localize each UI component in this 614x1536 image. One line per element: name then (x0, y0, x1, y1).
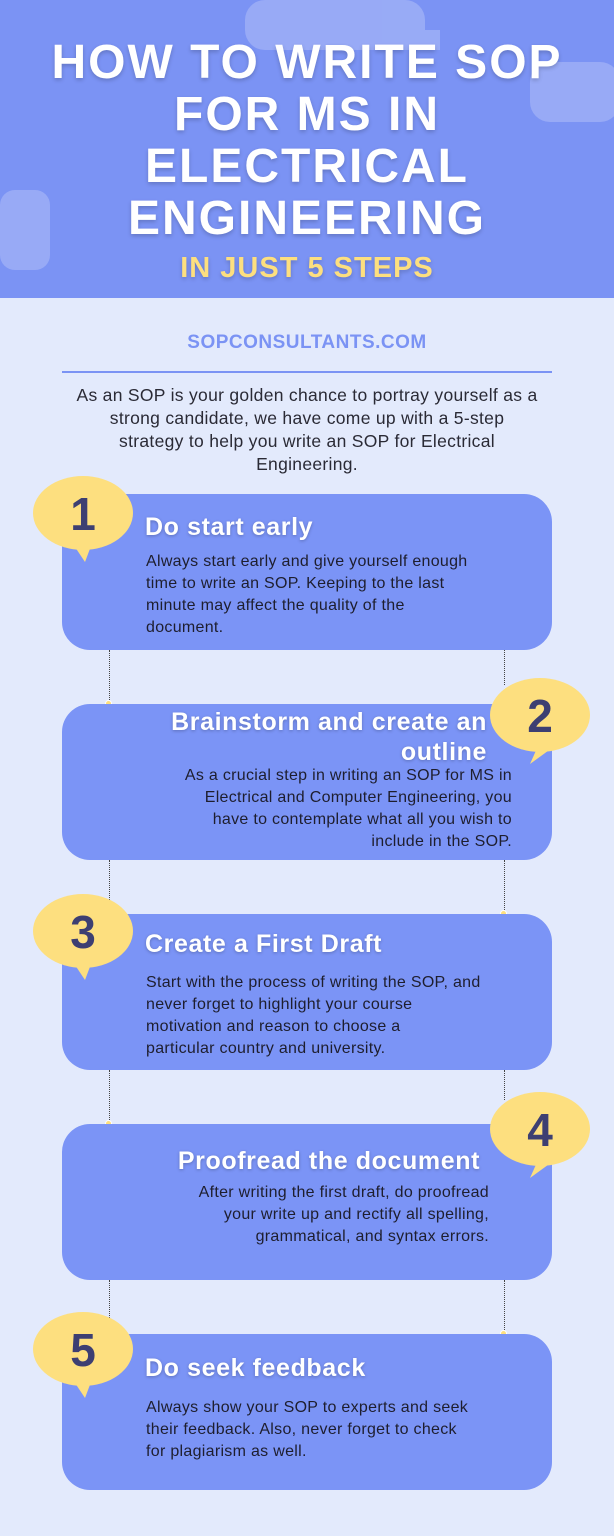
title: ELECTRICAL (145, 140, 469, 193)
title: FOR MS IN (174, 88, 440, 141)
bubble 4: 4 (527, 1104, 553, 1156)
intro text (76, 385, 538, 474)
step 1: Do start early (145, 513, 313, 541)
bubble 5 (33, 1312, 133, 1398)
step 5: their feedback. Also, never forget to check (146, 1421, 457, 1438)
step 2: include in the SOP. (371, 833, 512, 850)
step 4: After writing the first draft, do proofread (199, 1184, 489, 1201)
step 4: Proofread the document (178, 1147, 480, 1175)
step 5: Always show your SOP to experts and seek (146, 1399, 468, 1416)
step 3 (62, 914, 552, 1070)
title: HOW TO WRITE SOP (51, 36, 563, 89)
bubble 1 (33, 476, 133, 562)
step 4 (62, 1124, 552, 1280)
bubble 3: 3 (70, 906, 96, 958)
step 5 (62, 1334, 552, 1490)
step 5: Do seek feedback (145, 1354, 366, 1382)
step 1 (62, 494, 552, 650)
step 3: never forget to highlight your course (146, 996, 412, 1013)
step 2: Brainstorm and create an (171, 708, 487, 736)
step 5: for plagiarism as well. (146, 1443, 307, 1460)
step 2: Electrical and Computer Engineering, you (205, 789, 512, 806)
header (0, 0, 614, 298)
intro text: As an SOP is your golden chance to portray yourself as a (76, 385, 538, 405)
step 3: Create a First Draft (145, 930, 382, 958)
step 2 (62, 704, 552, 860)
step 3: Start with the process of writing the SOP, and (146, 974, 481, 991)
step 2: have to contemplate what all you wish to (213, 811, 512, 828)
step 1: document. (146, 619, 223, 636)
subtitle: IN JUST 5 STEPS (180, 252, 434, 284)
bubble 5: 5 (70, 1324, 96, 1376)
step 4: your write up and rectify all spelling, (224, 1206, 489, 1223)
step 1: minute may affect the quality of the (146, 597, 405, 614)
step 4: grammatical, and syntax errors. (256, 1228, 489, 1245)
intro text: strong candidate, we have come up with a 5-step (110, 408, 504, 428)
bubble 3 (33, 894, 133, 980)
title: ENGINEERING (128, 192, 486, 245)
step 2: As a crucial step in writing an SOP for MS in (185, 767, 512, 784)
connectors (109, 650, 110, 704)
bubble 2: 2 (527, 690, 553, 742)
bubble 4 (490, 1092, 590, 1178)
intro text: Engineering. (256, 454, 358, 474)
step 1: time to write an SOP. Keeping to the last (146, 575, 444, 592)
step 3: particular country and university. (146, 1040, 385, 1057)
title (51, 36, 563, 245)
bubble 1: 1 (70, 488, 96, 540)
intro text: strategy to help you write an SOP for Electrical (119, 431, 495, 451)
step 2: outline (401, 738, 487, 766)
bubble 2 (490, 678, 590, 764)
website: SOPCONSULTANTS.COM (187, 332, 427, 353)
step 1: Always start early and give yourself enough (146, 553, 468, 570)
step 3: motivation and reason to choose a (146, 1018, 401, 1035)
